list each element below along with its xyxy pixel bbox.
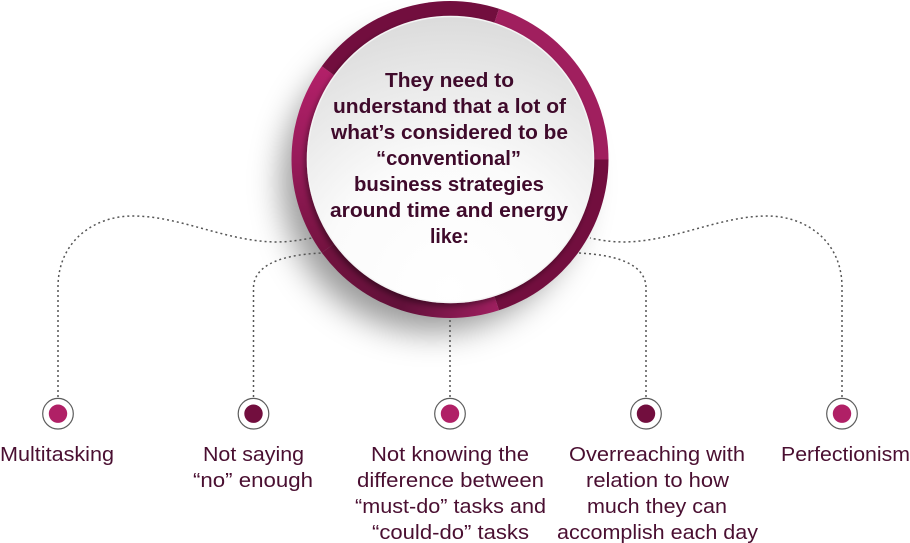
connector: Not knowing the difference bbox=[449, 320, 451, 397]
label: Overreaching: Overreaching with bbox=[569, 444, 745, 466]
label: Not saying no enough bbox=[193, 444, 313, 492]
label: Overreaching: much they can bbox=[587, 496, 727, 518]
node: Overreaching bbox=[631, 398, 661, 429]
ring segment: bottom bbox=[322, 160, 499, 318]
central heading text bbox=[330, 70, 569, 248]
label: Not saying no enough: Not saying bbox=[203, 444, 304, 466]
label: Not knowing the difference bbox=[355, 444, 546, 543]
inner disc bbox=[308, 16, 594, 302]
node: Multitasking bbox=[43, 398, 73, 429]
connector: Overreaching bbox=[578, 253, 646, 397]
label: Multitasking: Multitasking bbox=[0, 444, 114, 466]
label: Overreaching: relation to how bbox=[586, 470, 730, 492]
ring segment: lower right bbox=[450, 160, 608, 310]
node: Not saying no enough bbox=[238, 398, 269, 429]
node: Not knowing the difference bbox=[435, 398, 465, 429]
node: Perfectionism bbox=[827, 398, 857, 429]
central circle bbox=[292, 1, 608, 318]
label: Perfectionism: Perfectionism bbox=[781, 444, 910, 466]
connector: Multitasking bbox=[58, 216, 312, 397]
ring segment: upper right bbox=[450, 9, 608, 159]
ring segment: left bbox=[292, 66, 450, 253]
central heading text: “conventional” bbox=[376, 148, 521, 170]
connector: Not saying no enough bbox=[254, 253, 322, 397]
label: Not knowing the difference: “must-do” tasks and bbox=[355, 496, 546, 518]
label: Not knowing the difference: difference between bbox=[357, 470, 544, 492]
ring segment: top bbox=[322, 1, 499, 160]
label: Not knowing the difference: Not knowing the bbox=[371, 444, 529, 466]
central heading text: They need to bbox=[385, 70, 514, 92]
label: Not saying no enough: “no” enough bbox=[193, 470, 313, 492]
central heading text: around time and energy bbox=[330, 200, 569, 222]
central heading text: what’s considered to be bbox=[330, 122, 568, 144]
label: Overreaching bbox=[557, 444, 758, 543]
connector: Perfectionism bbox=[590, 216, 842, 397]
central heading text: understand that a lot of bbox=[333, 96, 566, 118]
central heading text: like: bbox=[430, 226, 469, 248]
drop shadow of central circle bbox=[282, 32, 582, 332]
central heading text: business strategies bbox=[354, 174, 544, 196]
